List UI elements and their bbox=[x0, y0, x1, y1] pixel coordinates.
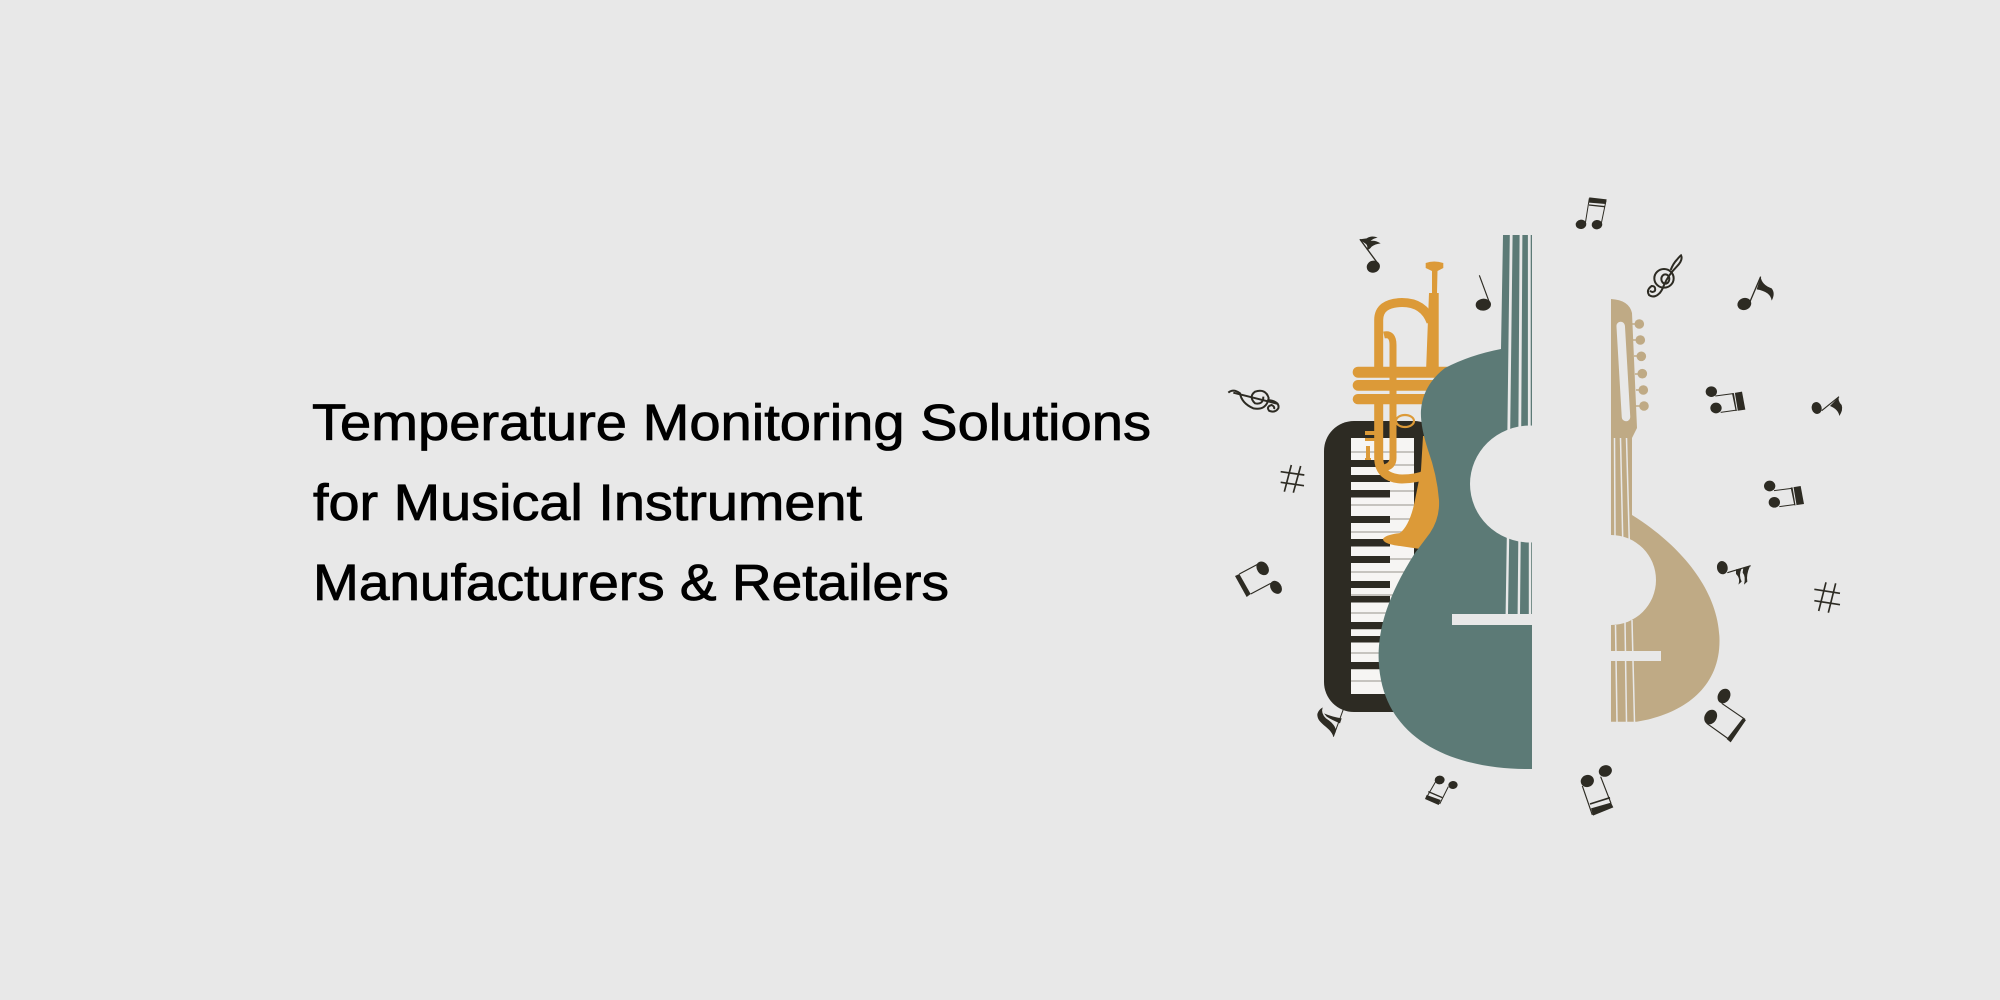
icons: musical notes left and centre bbox=[1228, 236, 1491, 805]
title: for Musical Instrument bbox=[313, 474, 862, 531]
icon: sharp sign right bbox=[1814, 582, 1840, 613]
icon: piano keyboard bbox=[1324, 421, 1444, 712]
icon: beamed notes left bbox=[1235, 559, 1284, 597]
icon: beamed notes top bbox=[1575, 197, 1607, 230]
icon: treble clef left bbox=[1228, 391, 1279, 412]
icon: flag note far right bbox=[1810, 397, 1842, 416]
icon: flag note bottom left bbox=[1317, 707, 1343, 737]
icon: trumpet bbox=[1353, 262, 1460, 549]
icon: beamed notes right one bbox=[1706, 386, 1745, 413]
icon: treble clef right bbox=[1648, 255, 1682, 296]
title: Temperature Monitoring Solutions bbox=[312, 394, 1151, 451]
icon: teal guitar half bbox=[1379, 235, 1590, 769]
icon: flag note mid right bbox=[1716, 560, 1751, 585]
title: Manufacturers & Retailers bbox=[313, 554, 949, 611]
icon: flag note upper right bbox=[1736, 277, 1774, 312]
icon: beamed notes lower right bbox=[1702, 686, 1746, 742]
icon: beamed notes bottom right bbox=[1579, 763, 1614, 816]
icon: beamed notes bottom bbox=[1425, 775, 1458, 805]
icon: sharp sign left bbox=[1281, 465, 1304, 493]
icon: flagged note top left bbox=[1359, 236, 1382, 275]
title bbox=[312, 394, 1151, 611]
icon: tan guitar half bbox=[1566, 299, 1720, 722]
icons: musical notes lower right bbox=[1579, 560, 1840, 816]
icons: musical notes right bbox=[1575, 197, 1842, 508]
icon: beamed notes right two bbox=[1764, 481, 1804, 508]
icon: quarter note bbox=[1475, 275, 1491, 311]
